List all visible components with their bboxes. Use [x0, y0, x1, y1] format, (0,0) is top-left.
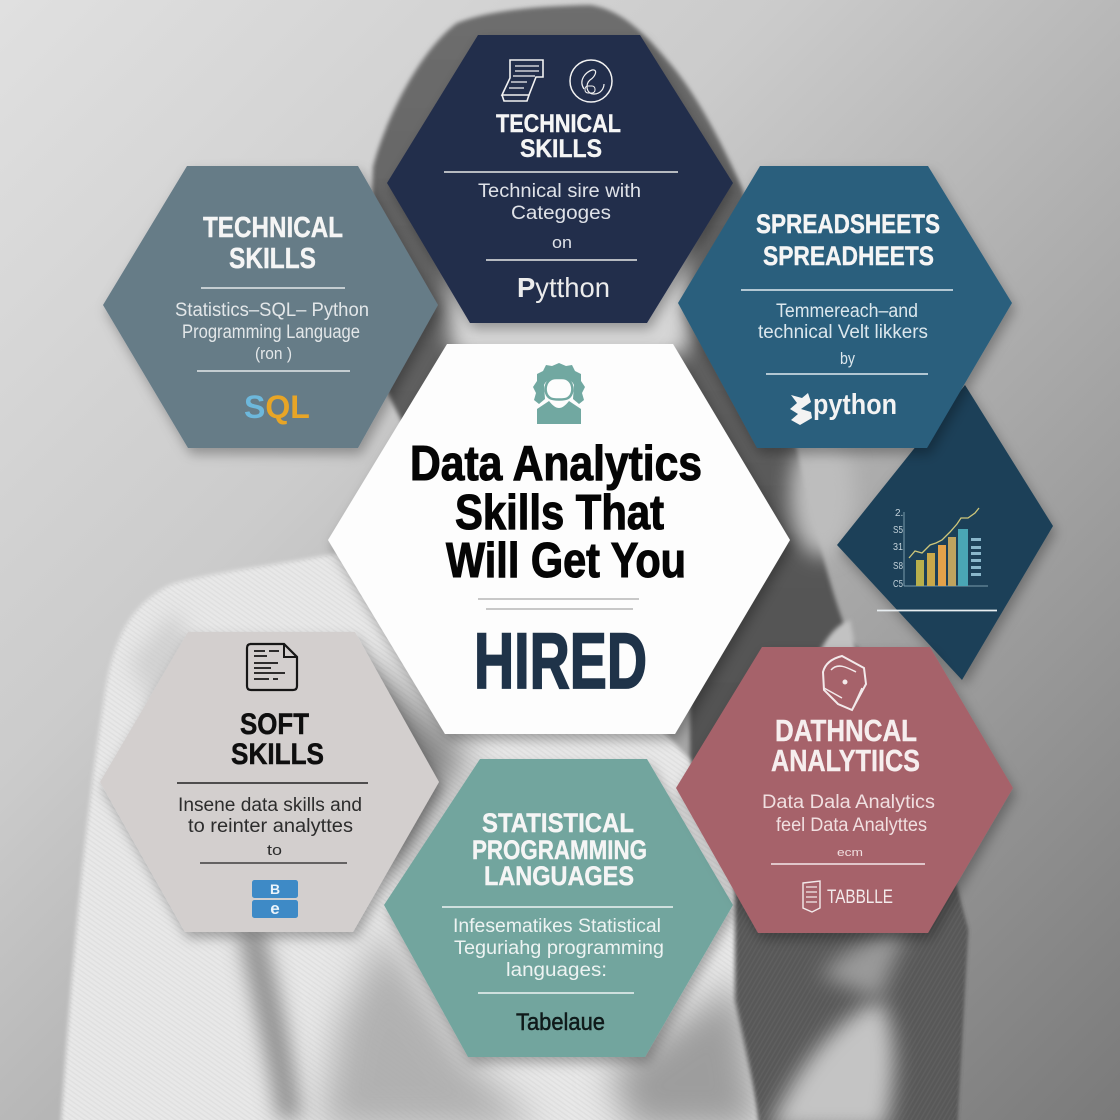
heading: SKILLS — [231, 738, 324, 771]
body text: technical Velt likkers — [758, 322, 928, 343]
panel: soft skills — [100, 632, 439, 932]
heading: STATISTICAL — [482, 808, 634, 838]
logo: Tableau: TABBLLE — [827, 887, 893, 908]
title: Skills That — [455, 486, 664, 540]
body text: on — [552, 233, 572, 252]
body text: (ron ) — [255, 344, 292, 363]
heading: SPREADHEETS — [763, 241, 934, 271]
line and bar chart: C5 — [893, 579, 903, 590]
heading: ANALYTIICS — [771, 743, 920, 778]
icon: document scroll — [502, 60, 543, 101]
logo: Python: Pytthon — [517, 272, 610, 303]
body text: Programming Language — [182, 322, 360, 343]
logo: blue tiles: e — [270, 899, 280, 918]
body text: Technical sire with — [478, 181, 641, 202]
heading — [231, 708, 324, 771]
heading: LANGUAGES — [484, 861, 634, 891]
logo: blue tiles — [252, 880, 298, 918]
heading — [771, 713, 920, 778]
logo: python: python — [813, 389, 897, 421]
heading: SOFT — [240, 708, 309, 741]
hair lower right — [735, 690, 967, 1120]
heading: TECHNICAL — [496, 110, 621, 138]
title: Data Analytics — [410, 437, 702, 491]
line and bar chart — [893, 508, 988, 590]
line and bar chart: 2. — [895, 508, 903, 519]
heading — [496, 110, 621, 163]
body text — [478, 181, 641, 252]
panel: statistical programming languages — [384, 759, 733, 1057]
logo: SQL: QL — [265, 389, 310, 425]
hair — [368, 5, 967, 1120]
heading: SKILLS — [520, 135, 602, 163]
title: Will Get You — [446, 534, 686, 588]
panel: technical skills navy — [387, 35, 733, 323]
body text: Data Dala Analytics — [762, 792, 935, 813]
logo: Tableau — [803, 881, 893, 912]
icon: person with gear — [533, 363, 585, 424]
body text: feel Data Analyttes — [776, 815, 927, 836]
line and bar chart: S8 — [893, 561, 903, 572]
sweater folds — [238, 930, 302, 1120]
face — [445, 130, 690, 420]
line and bar chart: 31 — [893, 542, 903, 553]
logo: SQL: S — [244, 389, 265, 425]
icon: circle emblem — [570, 60, 612, 102]
body text: ecm — [837, 847, 863, 859]
highlighted word: HIRED — [474, 616, 647, 705]
title — [410, 437, 702, 588]
panel: chart diamond — [837, 385, 1053, 680]
panel: central title — [328, 344, 790, 734]
body text — [758, 301, 928, 368]
body text: Statistics–SQL– Python — [175, 300, 369, 321]
heading: PROGRAMMING — [472, 835, 647, 865]
light strands right of centre — [790, 433, 854, 557]
body text — [175, 300, 369, 363]
body text: Infesematikes Statistical — [453, 916, 661, 937]
heading — [203, 212, 343, 275]
logo: python — [790, 389, 897, 425]
body text: languages: — [506, 960, 607, 981]
body text — [178, 795, 362, 859]
icon: document — [247, 644, 297, 690]
body text: Temmereach–and — [776, 301, 918, 322]
panel: data analytics pink — [676, 647, 1013, 933]
heading: SPREADSHEETS — [756, 209, 940, 239]
body text — [762, 792, 935, 859]
panel: spreadsheets blue — [678, 166, 1012, 448]
sweater — [60, 545, 760, 1120]
heading: SKILLS — [229, 243, 316, 275]
heading — [756, 209, 940, 271]
logo: Tabelaue: Tabelaue — [516, 1009, 605, 1036]
body text: to — [267, 842, 282, 859]
body text: Insene data skills and — [178, 795, 362, 816]
panel: technical skills slate — [103, 166, 438, 448]
line and bar chart: S5 — [893, 525, 903, 536]
body text: Categoges — [511, 203, 611, 224]
logo: blue tiles: B — [270, 881, 280, 897]
heading — [472, 808, 647, 891]
body text — [453, 916, 664, 981]
heading: TECHNICAL — [203, 212, 343, 244]
icon: brain emblem — [823, 656, 866, 710]
body text: to reinter analyttes — [188, 816, 353, 837]
body text: by — [840, 349, 855, 368]
heading: DATHNCAL — [775, 713, 917, 748]
body text: Teguriahg programming — [454, 938, 664, 959]
